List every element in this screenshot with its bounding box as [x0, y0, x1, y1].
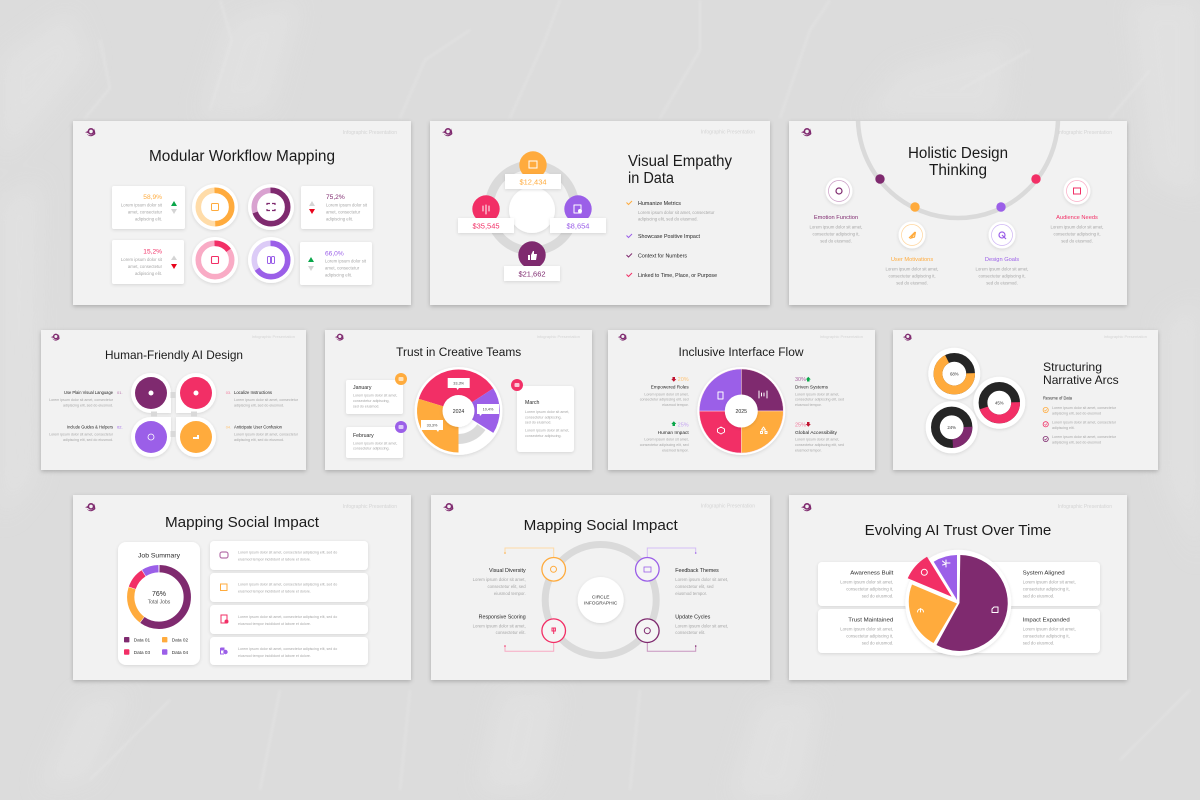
stat: Global Accessibility: Lorem ipsum dolor sit amet, — [795, 438, 839, 442]
callout: left — [421, 420, 443, 432]
stat: Driven Systems: eiusmod tempor. — [795, 403, 822, 407]
text: 03 — [226, 390, 299, 408]
stat: Driven Systems — [795, 377, 844, 407]
stat: Empowered Roles: consectetur adipiscing elit, sed — [640, 398, 689, 402]
resume list: Lorem ipsum dolor sit amet, consectetur — [1052, 406, 1117, 410]
resume list: adipiscing elit, sed do eiusmod — [1052, 411, 1101, 415]
node: $35,545: $35,545 — [472, 222, 500, 230]
stat: Global Accessibility — [795, 422, 844, 452]
card: March: sed do eiusmod. — [525, 421, 551, 425]
checklist: Lorem ipsum dolor sit amet, consectetur — [638, 210, 715, 215]
donut: 24%: 24% — [947, 425, 956, 430]
text: 04: 04. — [226, 424, 231, 429]
connectors — [151, 392, 197, 437]
text: Feedback Themes: consectetur elit, sed — [675, 584, 714, 589]
stat: Driven Systems: consectetur adipiscing elit, sed — [795, 398, 844, 402]
exploded pie chart — [905, 550, 1011, 656]
row 3: eiusmod tempor incididunt ut labore et dolore. — [238, 622, 311, 626]
pie chart 2024 — [414, 367, 502, 455]
card: February: consectetur adipiscing. — [353, 446, 390, 450]
stat: Human Impact: consectetur adipiscing elit, sed — [640, 443, 689, 447]
donut: orange — [192, 184, 238, 230]
item: Emotion Function — [809, 178, 863, 244]
card: March: consectetur adipiscing. — [525, 434, 562, 438]
item: User Motivations: consectetur adipiscing it, — [888, 274, 936, 278]
text: Visual Diversity: Lorem ipsum dolor sit amet, — [473, 577, 526, 582]
card: 66,0%: 66,0% — [325, 250, 344, 258]
item: Audience Needs: Lorem ipsum dolor sit amet, — [1050, 224, 1104, 230]
text: Feedback Themes: Lorem ipsum dolor sit amet, — [675, 577, 728, 582]
text: 01 — [49, 390, 123, 408]
item: Design Goals: Lorem ipsum dolor sit amet, — [975, 266, 1029, 272]
title: Evolving AI Trust Over Time — [865, 522, 1051, 539]
logo — [442, 128, 452, 136]
node: pink — [542, 619, 566, 642]
stat: Human Impact: Lorem ipsum dolor sit amet, — [644, 438, 689, 442]
stat: Global Accessibility: Global Accessibility — [795, 430, 838, 435]
text: Awareness Built: sed do eiusmod. — [862, 594, 893, 599]
text: Awareness Built: Lorem ipsum dolor sit amet, — [840, 580, 893, 585]
panel: Structuring Narrative Arcs — [893, 330, 1158, 470]
card: job summary — [118, 542, 200, 665]
pie chart 2025: 2025 — [736, 409, 747, 415]
text: 03: Localize Instructions — [234, 390, 272, 395]
resume list: adipiscing elit, sed do eiusmod — [1052, 441, 1101, 445]
stat: Empowered Roles — [640, 377, 689, 407]
title: Mapping Social Impact — [165, 515, 319, 531]
callout: right — [477, 404, 499, 416]
text: Impact Expanded: consectetur adipiscing it, — [1023, 634, 1070, 639]
item: Audience Needs: Audience Needs — [1056, 215, 1098, 221]
card: March: Lorem ipsum dolor sit amet, — [525, 410, 569, 414]
item: User Motivations: sed do eiusmod. — [896, 280, 928, 286]
text: Feedback Themes: eiusmod tempor. — [675, 591, 707, 596]
card: top — [818, 562, 1100, 606]
quadrant: orange — [176, 417, 216, 457]
card: January: consectetur adipiscing, — [353, 399, 390, 403]
item: Emotion Function: sed do eiusmod. — [820, 238, 852, 244]
title: Narrative Arcs — [1043, 373, 1119, 387]
logo — [85, 503, 95, 511]
text: 03: 03. — [226, 390, 231, 395]
donut: 45%: 45% — [995, 400, 1004, 405]
row 2: eiusmod tempor incididunt ut labore et dolore. — [238, 590, 311, 594]
text: Awareness Built: consectetur adipiscing it, — [846, 587, 893, 592]
node: $21,662: $21,662 — [518, 270, 546, 278]
text: System Aligned: consectetur adipiscing it, — [1023, 587, 1070, 592]
text: Visual Diversity: eiusmod tempor. — [494, 591, 526, 596]
ring — [489, 165, 575, 251]
item: Design Goals — [975, 222, 1029, 286]
item: Design Goals: Design Goals — [985, 257, 1019, 263]
header label: Infographic Presentation — [701, 130, 755, 136]
resume list: Lorem ipsum dolor sit amet, consectetur — [1052, 435, 1117, 439]
card: February: February — [353, 433, 374, 439]
text: Update Cycles: Lorem ipsum dolor sit amet, — [675, 624, 728, 628]
header label: Infographic Presentation — [343, 504, 397, 510]
text: 04: Lorem ipsum dolor sit amet, consectetur — [234, 432, 299, 436]
panel: Visual Empathy in Data — [430, 121, 770, 305]
arc — [856, 121, 1060, 220]
text: 02: Include Guides & Helpers — [67, 424, 113, 429]
text: Visual Diversity: Visual Diversity — [489, 568, 526, 574]
text: Responsive Scoring — [473, 614, 526, 635]
stat: Driven Systems: Driven Systems — [795, 384, 829, 390]
panel: Human-Friendly AI Design — [41, 330, 306, 470]
stat: Human Impact: Human Impact — [658, 430, 689, 435]
title: Mapping Social Impact — [524, 518, 678, 534]
donut chart — [131, 569, 187, 625]
node: $12,434 — [505, 151, 561, 189]
center label — [578, 577, 624, 623]
card: 75,2%: amet, consectetur — [326, 210, 361, 214]
card: job summary: Total Jobs — [148, 600, 171, 606]
logo — [85, 128, 95, 136]
card: 58,9%: adipiscing elit. — [135, 216, 162, 222]
pie chart 2025 — [697, 367, 785, 455]
text: System Aligned: Lorem ipsum dolor sit amet, — [1023, 580, 1076, 585]
stat: Driven Systems: 30% — [795, 377, 806, 383]
text: 02: Lorem ipsum dolor sit amet, consectetur — [49, 432, 114, 436]
item: Design Goals: sed do eiusmod. — [986, 280, 1018, 286]
stat: Human Impact — [640, 421, 689, 452]
card: job summary: 76% — [152, 591, 166, 598]
stat: Empowered Roles: Lorem ipsum dolor sit amet, — [644, 392, 689, 396]
text: Feedback Themes — [675, 568, 728, 596]
panel: Inclusive Interface Flow — [608, 330, 875, 470]
card: 75,2%: Lorem ipsum dolor sit — [326, 202, 368, 208]
panel: Evolving AI Trust Over Time — [789, 495, 1127, 680]
text: System Aligned — [1023, 570, 1076, 599]
card: job summary: Job Summary — [138, 552, 181, 560]
text: Update Cycles — [675, 614, 728, 635]
text: Trust Maintained: Trust Maintained — [848, 617, 893, 623]
text: 01: 01. — [117, 390, 123, 395]
card: 15,2%: 15,2% — [143, 248, 162, 256]
row 4: eiusmod tempor incididunt ut labore et dolore. — [238, 654, 311, 658]
callout: top — [448, 378, 470, 390]
stat: Global Accessibility: 25% — [795, 422, 806, 428]
title: in Data — [628, 170, 674, 187]
row 2 — [210, 573, 368, 602]
center label: CIRCLE — [592, 595, 609, 601]
text: 01: Use Plain Visual Language — [64, 390, 114, 395]
quadrant: pink — [176, 373, 216, 413]
text: Awareness Built: Awareness Built — [850, 570, 894, 576]
text: Impact Expanded: Lorem ipsum dolor sit amet, — [1023, 627, 1076, 632]
text: Visual Diversity: consectetur elit, sed — [487, 584, 526, 589]
legend: Data 04 — [172, 650, 189, 655]
node: $21,662 — [504, 241, 560, 281]
node: $12,434: $12,434 — [519, 178, 547, 186]
header label: Infographic Presentation — [343, 130, 397, 136]
text: Trust Maintained: Lorem ipsum dolor sit amet, — [840, 627, 893, 632]
donut: 68%: 68% — [950, 371, 959, 376]
item: Emotion Function: Lorem ipsum dolor sit amet, — [809, 224, 863, 230]
donut: violet — [248, 237, 294, 283]
title: Modular Workflow Mapping — [149, 148, 335, 165]
callout: left: 33,3% — [427, 424, 438, 428]
header label: Infographic Presentation — [701, 504, 755, 510]
card: 58,9% — [112, 186, 185, 229]
node: $35,545 — [458, 195, 514, 233]
legend: Data 01 — [134, 638, 151, 642]
arc dots — [875, 174, 1041, 212]
header label: Infographic Presentation — [1058, 504, 1112, 510]
logo — [51, 334, 60, 341]
title: Trust in Creative Teams — [396, 347, 521, 359]
stat: Human Impact: 25% — [678, 422, 689, 428]
header label: Infographic Presentation — [252, 334, 295, 339]
donut: purple — [248, 184, 294, 230]
node: violet — [636, 558, 659, 581]
header label: Infographic Presentation — [1104, 334, 1147, 339]
card: 15,2%: amet, consectetur — [128, 264, 163, 269]
text: System Aligned: sed do eiusmod. — [1023, 594, 1054, 599]
item: Emotion Function: consectetur adipiscing it, — [812, 232, 860, 236]
legend: Data 03 — [134, 650, 151, 655]
pie icons — [918, 560, 998, 612]
stat: Global Accessibility: eiusmod tempor. — [795, 448, 822, 452]
stat: Driven Systems: Lorem ipsum dolor sit amet, — [795, 392, 839, 396]
checklist: Showcase Positive Impact — [638, 234, 701, 240]
text: 01: adipiscing elit, sed do eiusmod. — [63, 404, 113, 408]
card: 66,0%: adipiscing elit. — [325, 272, 352, 278]
item: User Motivations: Lorem ipsum dolor sit amet, — [885, 266, 939, 272]
title: Visual Empathy — [628, 153, 732, 170]
panel: Modular Workflow Mapping — [73, 121, 411, 305]
text: 02: 02. — [117, 424, 123, 429]
text: Trust Maintained: sed do eiusmod. — [862, 641, 893, 646]
card: March: March — [525, 400, 540, 406]
logo — [618, 334, 627, 341]
item: Audience Needs — [1050, 178, 1104, 244]
pie chart 2024: 2024 — [453, 409, 464, 415]
logo — [801, 128, 811, 136]
text: Awareness Built — [840, 570, 894, 599]
card: 66,0%: amet, consectetur — [325, 266, 360, 270]
node: $8,654 — [550, 195, 606, 233]
text: 02: adipiscing elit, sed do eiusmod. — [63, 438, 113, 442]
checklist: adipiscing elit, sed do eiusmod. — [638, 216, 698, 222]
text: 01: Lorem ipsum dolor sit amet, consectetur — [49, 398, 114, 402]
card: 75,2%: 75,2% — [326, 194, 345, 201]
legend — [124, 637, 189, 655]
text: Impact Expanded: sed do eiusmod. — [1023, 641, 1054, 646]
panel: Mapping Social Impact (job summary) — [73, 495, 411, 680]
row 2: Lorem ipsum dolor sit amet, consectetur adipiscing elit, sed do — [238, 583, 337, 587]
text: 03: adipiscing elit, sed do eiusmod. — [234, 404, 284, 408]
pie icons — [718, 391, 767, 434]
logo — [903, 334, 912, 341]
row 3: Lorem ipsum dolor sit amet, consectetur adipiscing elit, sed do — [238, 615, 337, 619]
text: System Aligned: System Aligned — [1023, 570, 1065, 576]
card: March: Lorem ipsum dolor sit amet, — [525, 428, 569, 432]
center circle — [509, 187, 555, 233]
donut: 24% — [926, 401, 978, 453]
resume list — [1043, 396, 1117, 445]
card: January: Lorem ipsum dolor sit amet, — [353, 393, 397, 397]
card: bottom — [818, 609, 1100, 653]
logo — [335, 334, 344, 341]
card: 58,9%: 58,9% — [143, 194, 162, 201]
row 4: Lorem ipsum dolor sit amet, consectetur adipiscing elit, sed do — [238, 647, 337, 651]
resume list: Lorem ipsum dolor sit amet, consectetur — [1052, 421, 1117, 425]
stat: Empowered Roles: 20% — [678, 377, 689, 383]
card: 58,9%: Lorem ipsum dolor sit — [121, 202, 163, 208]
title: Human-Friendly AI Design — [105, 348, 243, 362]
donut: pink — [192, 237, 238, 283]
checklist: Linked to Time, Place, or Purpose — [638, 273, 717, 279]
stat: Human Impact: eiusmod tempor. — [662, 448, 689, 452]
donut: 45% — [973, 377, 1025, 429]
row 1: eiusmod tempor incididunt ut labore et dolore. — [238, 558, 311, 562]
stat: Empowered Roles: Empowered Roles — [651, 384, 689, 390]
logo — [443, 503, 453, 511]
checklist: Humanize Metrics — [638, 201, 681, 207]
card: 75,2%: adipiscing elit. — [326, 216, 353, 222]
title: Inclusive Interface Flow — [678, 347, 804, 359]
text: 04 — [226, 424, 299, 442]
text: Impact Expanded: Impact Expanded — [1023, 617, 1070, 623]
header label: Infographic Presentation — [537, 334, 580, 339]
text: Update Cycles: consectetur elit. — [675, 630, 705, 635]
item: Audience Needs: consectetur adipiscing it, — [1053, 232, 1101, 236]
header label: Infographic Presentation — [820, 334, 863, 339]
item: User Motivations: User Motivations — [891, 257, 933, 263]
panel: Trust in Creative Teams — [325, 330, 592, 470]
card: January: sed do eiusmod. — [353, 404, 379, 408]
card: January: January — [353, 385, 372, 391]
text: 04: adipiscing elit, sed do eiusmod. — [234, 438, 284, 442]
text: Responsive Scoring: Lorem ipsum dolor sit amet, — [473, 624, 526, 628]
card: 75,2% — [301, 186, 373, 229]
title: Thinking — [929, 162, 987, 179]
text: Feedback Themes: Feedback Themes — [675, 568, 719, 574]
checklist: Context for Numbers — [638, 254, 687, 260]
card: 15,2% — [112, 240, 184, 284]
text: Update Cycles: Update Cycles — [675, 614, 711, 620]
text: 02 — [49, 424, 123, 442]
card: February — [346, 421, 407, 458]
resume list: adipiscing elit. — [1052, 426, 1075, 430]
text: Trust Maintained: consectetur adipiscing it, — [846, 634, 893, 639]
item: Emotion Function: Emotion Function — [814, 215, 858, 221]
panel: Mapping Social Impact (circle) — [431, 495, 770, 680]
stat: Empowered Roles: eiusmod tempor. — [662, 403, 689, 407]
card: 66,0% — [300, 242, 372, 285]
quadrant: violet — [131, 417, 171, 457]
node: orange — [542, 558, 566, 581]
card: March: consectetur adipiscing, — [525, 415, 562, 419]
header label: Infographic Presentation — [1058, 130, 1112, 136]
text: 03: Lorem ipsum dolor sit amet, consectetur — [234, 398, 299, 402]
donut: 68% — [928, 348, 980, 400]
row 3 — [210, 605, 368, 634]
connectors — [504, 548, 696, 651]
title: Holistic Design — [908, 145, 1008, 162]
card: 15,2%: Lorem ipsum dolor sit — [121, 257, 163, 262]
card: 58,9%: amet, consectetur — [128, 210, 163, 214]
resume list: Resume of Data — [1043, 396, 1072, 400]
card: 15,2%: adipiscing elit. — [135, 271, 162, 276]
title: Structuring — [1043, 360, 1102, 374]
text: Responsive Scoring: consectetur elit. — [496, 630, 526, 635]
row 4 — [210, 637, 368, 665]
item: Audience Needs: sed do eiusmod. — [1061, 238, 1093, 244]
text: Impact Expanded — [1023, 617, 1076, 646]
panel: Holistic Design Thinking — [787, 120, 1129, 308]
row 1: Lorem ipsum dolor sit amet, consectetur adipiscing elit, sed do — [238, 551, 337, 555]
card: January — [346, 373, 407, 414]
card: March — [511, 379, 574, 452]
node: purple — [636, 619, 659, 642]
quadrant: purple — [131, 373, 171, 413]
text: Visual Diversity — [473, 568, 526, 596]
center label: INFOGRAPHIC — [584, 601, 618, 607]
checklist — [626, 201, 717, 279]
callout: top: 33,3% — [453, 382, 465, 386]
item: Design Goals: consectetur adipiscing it, — [978, 274, 1026, 278]
legend: Data 02 — [172, 638, 189, 642]
text: Trust Maintained — [840, 617, 893, 646]
ring — [545, 544, 656, 656]
callout: right: 10,4% — [483, 408, 494, 412]
card: February: Lorem ipsum dolor sit amet, — [353, 441, 397, 445]
item: User Motivations — [885, 222, 939, 286]
text: Responsive Scoring: Responsive Scoring — [479, 614, 526, 620]
row 1 — [210, 541, 368, 570]
text: 04: Anticipate User Confusion — [234, 424, 283, 429]
logo — [801, 503, 811, 511]
node: $8,654: $8,654 — [567, 222, 589, 230]
stat: Global Accessibility: consectetur adipiscing elit, sed — [795, 443, 844, 447]
card: 66,0%: Lorem ipsum dolor sit — [325, 258, 367, 264]
